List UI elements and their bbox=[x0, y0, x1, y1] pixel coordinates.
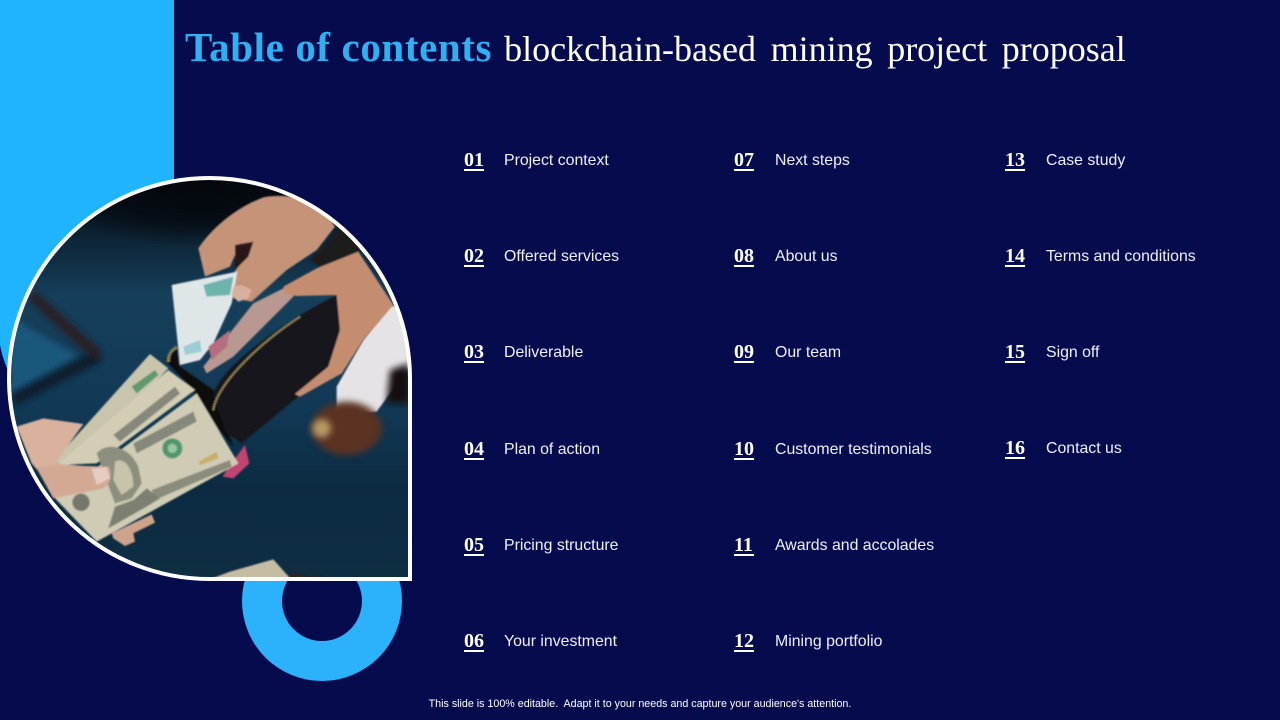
contents column 2 bbox=[734, 149, 934, 652]
item 04: 04 bbox=[464, 438, 484, 460]
item 10 bbox=[734, 438, 932, 460]
item 04 bbox=[464, 438, 600, 460]
item 01: Project context bbox=[504, 152, 609, 169]
contents column 1 bbox=[464, 149, 619, 652]
item 13: Case study bbox=[1046, 152, 1125, 169]
item 05: Pricing structure bbox=[504, 537, 618, 554]
item 15 bbox=[1005, 341, 1100, 363]
light blue ring bbox=[242, 521, 402, 681]
item 14 bbox=[1005, 245, 1196, 267]
item 15: 15 bbox=[1005, 341, 1025, 363]
footer note: This slide is 100% editable. Adapt it to your needs and capture your audience's attention. bbox=[429, 698, 851, 710]
photo: hands exchanging cash over a wallet bbox=[7, 176, 412, 581]
item 01 bbox=[464, 149, 609, 171]
item 08: 08 bbox=[734, 245, 754, 267]
item 08 bbox=[734, 245, 838, 267]
item 12: Mining portfolio bbox=[775, 633, 882, 650]
item 16 bbox=[1005, 437, 1122, 459]
item 11: 11 bbox=[734, 534, 753, 556]
item 14: Terms and conditions bbox=[1046, 248, 1196, 265]
item 10: 10 bbox=[734, 438, 754, 460]
item 10: Customer testimonials bbox=[775, 441, 932, 458]
item 07: 07 bbox=[734, 149, 754, 171]
item 16: 16 bbox=[1005, 437, 1025, 459]
item 02 bbox=[464, 245, 619, 267]
item 14: 14 bbox=[1005, 245, 1025, 267]
item 07: Next steps bbox=[775, 152, 850, 169]
contents column 3 bbox=[1005, 149, 1196, 459]
decorative graphics and photo bbox=[0, 0, 412, 681]
item 05: 05 bbox=[464, 534, 484, 556]
item 09: Our team bbox=[775, 344, 841, 361]
item 08: About us bbox=[775, 248, 838, 265]
item 06 bbox=[464, 630, 617, 652]
item 16: Contact us bbox=[1046, 440, 1122, 457]
item 12 bbox=[734, 630, 882, 652]
item 15: Sign off bbox=[1046, 344, 1099, 361]
light blue side panel bbox=[0, 0, 174, 374]
item 06: 06 bbox=[464, 630, 484, 652]
item 12: 12 bbox=[734, 630, 754, 652]
title: Table of contents blockchain-based mining project proposal bbox=[185, 24, 1126, 70]
item 13 bbox=[1005, 149, 1126, 171]
item 09: 09 bbox=[734, 341, 754, 363]
item 11 bbox=[734, 534, 934, 556]
white outline of photo bbox=[9, 178, 410, 579]
item 04: Plan of action bbox=[504, 441, 600, 458]
item 13: 13 bbox=[1005, 149, 1025, 171]
item 03 bbox=[464, 341, 583, 363]
item 03: 03 bbox=[464, 341, 484, 363]
item 07 bbox=[734, 149, 850, 171]
item 02: Offered services bbox=[504, 248, 619, 265]
item 09 bbox=[734, 341, 841, 363]
item 03: Deliverable bbox=[504, 344, 583, 361]
item 06: Your investment bbox=[504, 633, 617, 650]
item 05 bbox=[464, 534, 618, 556]
item 11: Awards and accolades bbox=[775, 537, 934, 554]
item 02: 02 bbox=[464, 245, 484, 267]
item 01: 01 bbox=[464, 149, 484, 171]
